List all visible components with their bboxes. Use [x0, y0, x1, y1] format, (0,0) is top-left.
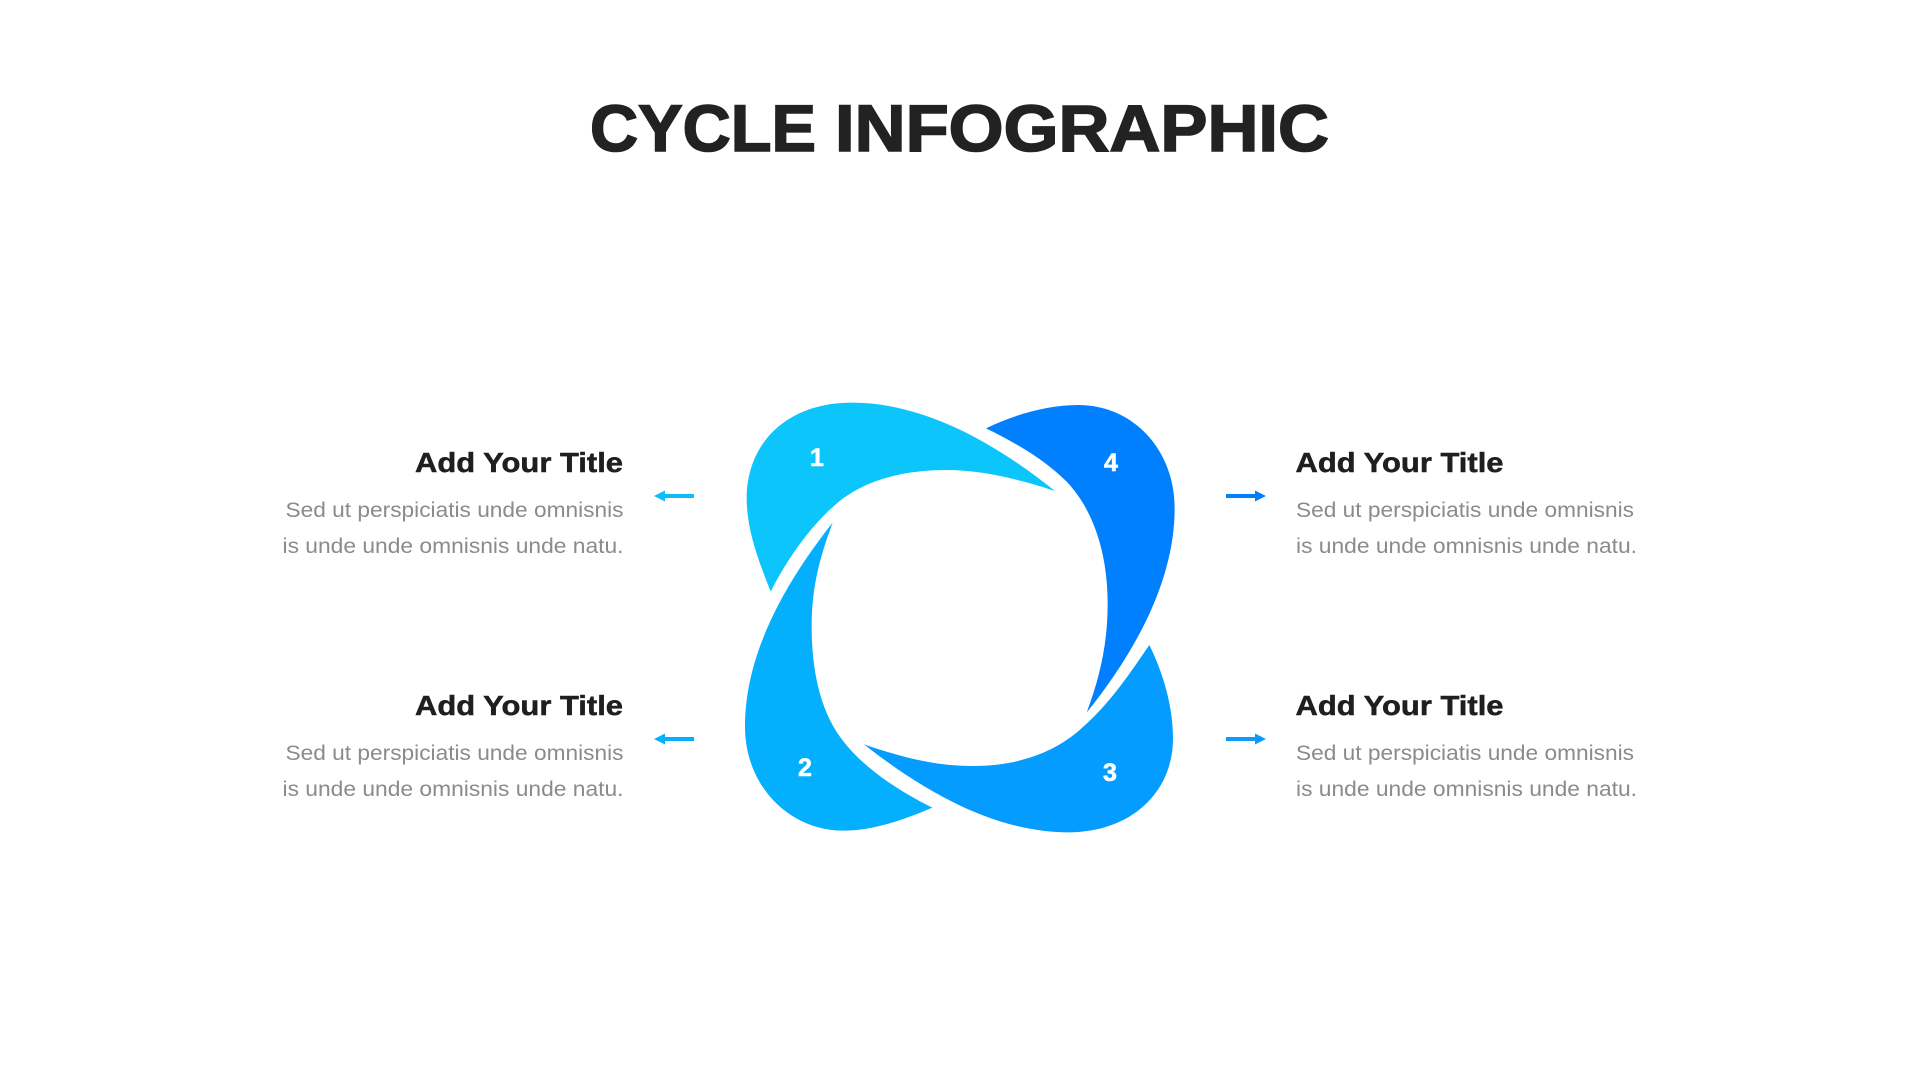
arrow: top right [1226, 490, 1266, 502]
cycle diagram [745, 403, 1175, 832]
arrow: bottom right [1226, 734, 1266, 744]
arrow: top left [654, 490, 694, 502]
petal 4: 4 [1104, 449, 1118, 477]
title: INFOGRAPHIC [835, 91, 1329, 165]
item 3: bottom right text: Sed ut perspiciatis unde omnisnis [1296, 742, 1634, 765]
item 1: top left text: Sed ut perspiciatis unde omnisnis [286, 499, 624, 522]
item 2: bottom left text: is unde unde omnisnis unde natu. [282, 778, 624, 801]
item 1: top left text: is unde unde omnisnis unde natu. [282, 535, 624, 558]
item 2: bottom left text: Sed ut perspiciatis unde omnisnis [286, 742, 624, 765]
petal 1: 1 [810, 444, 824, 472]
title [590, 91, 1329, 165]
item 1: top left text: Add Your Title [415, 447, 623, 478]
item 1: top left text [282, 447, 624, 558]
item 3: bottom right text: Add Your Title [1296, 690, 1504, 721]
petal 2 [745, 523, 932, 831]
arrow: bottom left [654, 734, 694, 744]
petal 4 [986, 405, 1175, 713]
title: CYCLE [590, 91, 816, 165]
item 4: top right text: is unde unde omnisnis unde natu. [1296, 535, 1637, 558]
item 3: bottom right text [1296, 690, 1637, 801]
petal 3: 3 [1103, 759, 1117, 787]
petal 1 [747, 403, 1055, 592]
item 2: bottom left text [282, 690, 624, 801]
item 4: top right text [1296, 447, 1637, 558]
item 3: bottom right text: is unde unde omnisnis unde natu. [1296, 778, 1637, 801]
petal 3 [864, 645, 1173, 832]
item 2: bottom left text: Add Your Title [415, 690, 623, 721]
item 4: top right text: Sed ut perspiciatis unde omnisnis [1296, 499, 1634, 522]
petal 2: 2 [798, 754, 812, 782]
item 4: top right text: Add Your Title [1296, 447, 1504, 478]
